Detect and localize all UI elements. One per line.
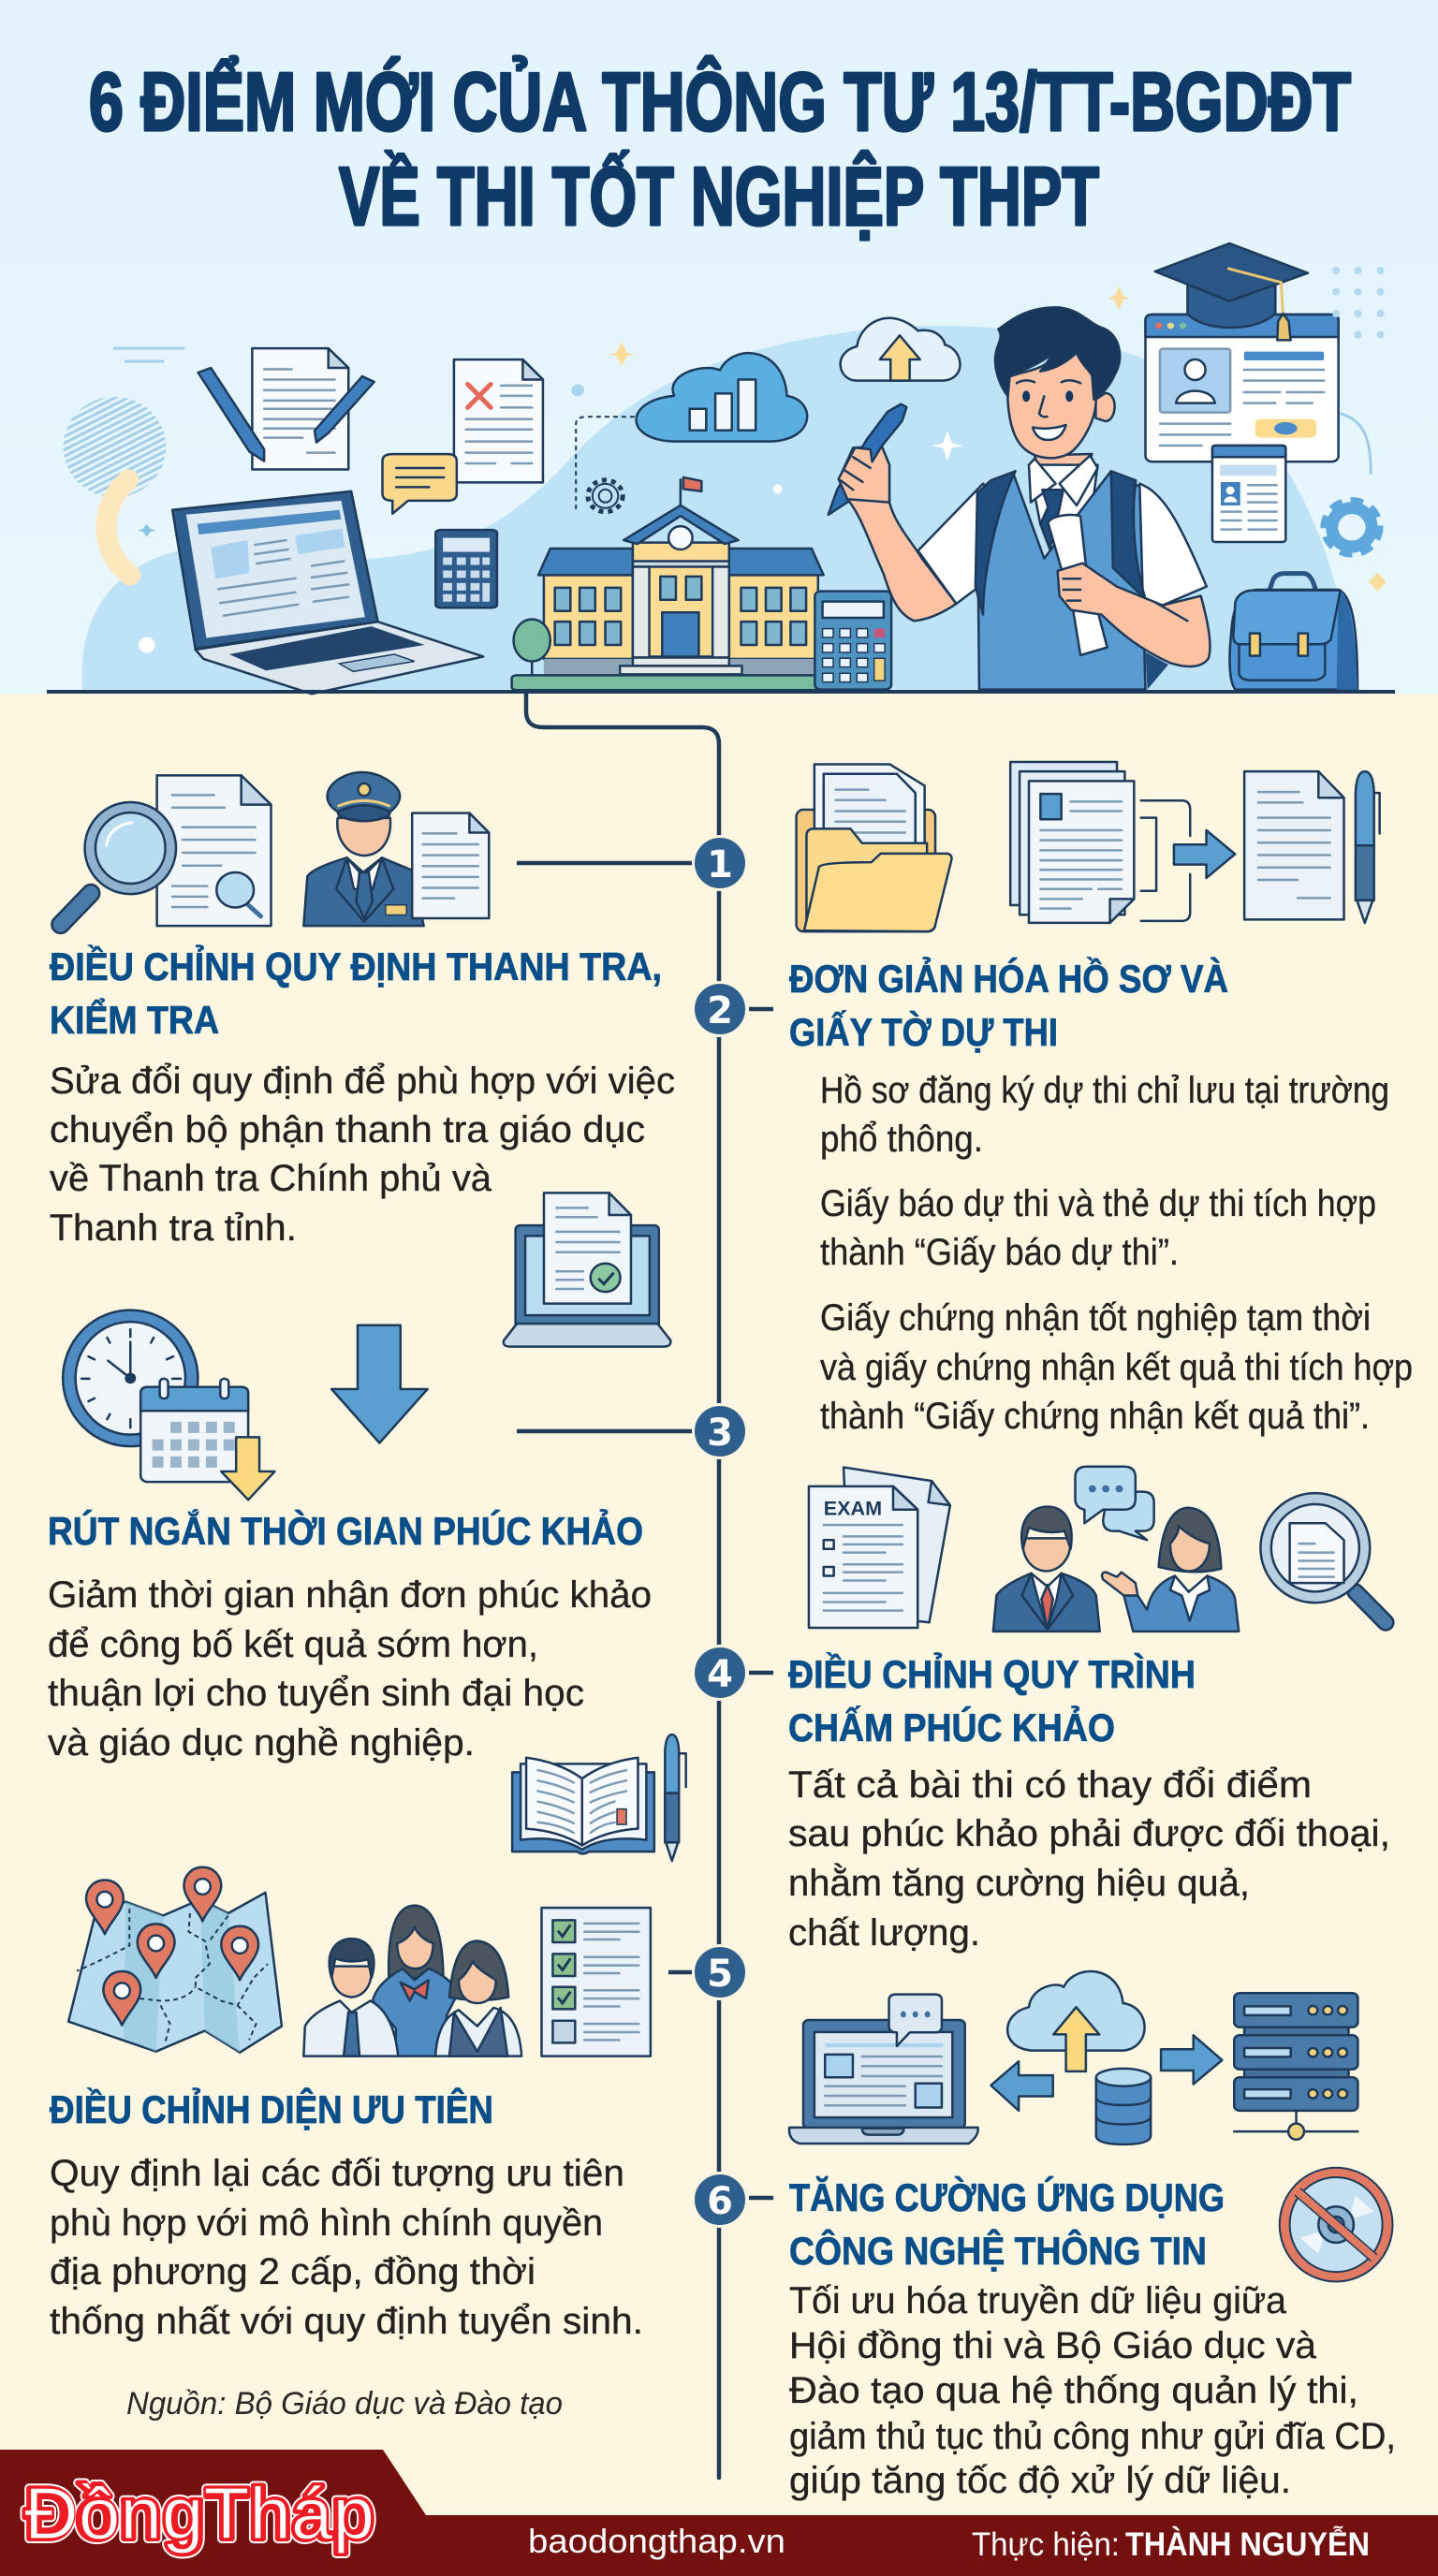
icons: folder, documents merge — [797, 762, 1380, 931]
student — [829, 307, 1210, 690]
briefcase — [1230, 574, 1357, 690]
body text: Giấy chứng nhận tốt nghiệp tạm thời — [820, 1297, 1371, 1339]
number 3: 3 — [707, 1412, 733, 1455]
blue gear — [1325, 502, 1379, 553]
document with red cross — [454, 359, 543, 482]
body text: phù hợp với mô hình chính quyền — [50, 2203, 603, 2244]
small calculator — [435, 530, 497, 607]
number 4: 4 — [707, 1653, 733, 1696]
title — [89, 55, 1351, 242]
panel 3: shorten review time — [48, 1310, 686, 1861]
footer bar — [0, 2450, 1438, 2576]
number 2: 2 — [707, 989, 733, 1032]
body text: Giảm thời gian nhận đơn phúc khảo — [48, 1574, 652, 1616]
source note: Nguồn: Bộ Giáo dục và Đào tạo — [126, 2386, 563, 2422]
heading: TĂNG CƯỜNG ỨNG DỤNG — [789, 2174, 1225, 2219]
heading: GIẤY TỜ DỰ THI — [789, 1009, 1058, 1054]
number 2 — [693, 983, 747, 1035]
number 5 — [693, 1945, 747, 1999]
header background — [0, 0, 1438, 694]
heading: ĐƠN GIẢN HÓA HỒ SƠ VÀ — [789, 956, 1228, 1001]
yellow arc — [106, 479, 130, 575]
number 5: 5 — [707, 1953, 733, 1996]
panel 2: dossier — [789, 762, 1413, 1437]
credit: THÀNH NGUYỄN — [1125, 2525, 1370, 2563]
body text: Tối ưu hóa truyền dữ liệu giữa — [789, 2280, 1287, 2321]
body text — [48, 1574, 652, 1764]
laptop — [172, 491, 483, 694]
body text: để công bố kết quả sớm hơn, — [48, 1624, 538, 1665]
timeline spine — [526, 694, 719, 2478]
panel 4: review procedure — [788, 1467, 1390, 1954]
body text: thống nhất với quy định tuyển sinh. — [50, 2301, 643, 2342]
graduation cap tassel and profile window — [1146, 315, 1339, 461]
icons: map, students, checklist — [68, 1867, 651, 2056]
panel 6: information technology — [789, 1971, 1396, 2501]
heading: KIỂM TRA — [50, 997, 219, 1042]
school building — [512, 477, 824, 690]
dashed connector — [576, 417, 635, 512]
body text — [50, 2153, 643, 2342]
icons: exam paper, dialogue, magnifier: EXAM — [824, 1498, 882, 1520]
logo: Đồng Tháp: ĐồngTháp — [24, 2472, 374, 2554]
heading — [789, 2174, 1225, 2273]
icons: clock, calendar, down arrow — [63, 1310, 428, 1500]
panel 5: priority groups — [50, 1867, 651, 2342]
body text: nhằm tăng cường hiệu quả, — [788, 1862, 1250, 1904]
icons: exam paper, dialogue, magnifier — [809, 1467, 1386, 1632]
body text: giảm thủ tục thủ công như gửi đĩa CD, — [789, 2416, 1396, 2457]
heading: ĐIỀU CHỈNH DIỆN ƯU TIÊN — [50, 2086, 493, 2131]
heading — [788, 1651, 1196, 1749]
credit — [972, 2525, 1370, 2563]
number 6 — [693, 2174, 747, 2226]
ground line — [47, 690, 1395, 694]
body text: Quy định lại các đối tượng ưu tiên — [50, 2153, 624, 2194]
small profile card — [1212, 446, 1285, 542]
credit: Thực hiện: — [972, 2526, 1120, 2563]
body text: chất lượng. — [788, 1912, 980, 1954]
panel 1: inspection — [50, 772, 675, 1347]
body text: Hội đồng thi và Bộ Giáo dục và — [789, 2325, 1317, 2366]
heading: CÔNG NGHỆ THÔNG TIN — [789, 2228, 1207, 2273]
timeline connectors — [517, 863, 773, 2198]
body text: Sửa đổi quy định để phù hợp với việc — [50, 1061, 675, 1102]
connector arc — [1341, 414, 1371, 475]
body text: địa phương 2 cấp, đồng thời — [50, 2251, 536, 2292]
dotted grid — [1332, 267, 1385, 339]
body text: thuận lợi cho tuyển sinh đại học — [48, 1673, 584, 1714]
cloud with bars — [637, 353, 807, 442]
number 3 — [693, 1404, 747, 1458]
body text: thành “Giấy báo dự thi”. — [820, 1232, 1179, 1273]
body text: chuyển bộ phận thanh tra giáo dục — [50, 1109, 645, 1150]
body text: Tất cả bài thi có thay đổi điểm — [788, 1764, 1312, 1806]
heading: CHẤM PHÚC KHẢO — [788, 1705, 1115, 1749]
body text: về Thanh tra Chính phủ và — [50, 1158, 492, 1199]
number 4 — [693, 1646, 747, 1700]
body text: Giấy báo dự thi và thẻ dự thi tích hợp — [820, 1183, 1376, 1224]
body text — [50, 1061, 675, 1249]
upload cloud — [841, 318, 961, 381]
icon: open book and pen — [512, 1734, 686, 1861]
body text: giúp tăng tốc độ xử lý dữ liệu. — [789, 2460, 1291, 2501]
body text: Thanh tra tỉnh. — [50, 1208, 297, 1249]
small gear — [588, 480, 623, 512]
background blob — [82, 326, 1357, 689]
body text: và giáo dục nghề nghiệp. — [48, 1722, 475, 1764]
hero illustration — [47, 243, 1395, 694]
number 6: 6 — [707, 2180, 733, 2223]
heading: RÚT NGẮN THỜI GIAN PHÚC KHẢO — [48, 1508, 643, 1553]
body text — [788, 1764, 1390, 1954]
icon: laptop with approved document — [504, 1193, 670, 1347]
icons: laptop, cloud, database, server, crossed disc — [789, 1971, 1393, 2281]
heading — [789, 956, 1228, 1054]
document with pens — [198, 348, 374, 469]
logo: Đồng Tháp: ĐồngTháp — [24, 2472, 374, 2554]
body text — [789, 2280, 1396, 2501]
website: baodongthap.vn — [528, 2522, 785, 2560]
number 1 — [693, 837, 747, 889]
heading: ĐIỀU CHỈNH QUY ĐỊNH THANH TRA, — [50, 944, 662, 988]
body text — [820, 1070, 1413, 1437]
icons: magnifier, document, officer — [61, 772, 489, 926]
body text: sau phúc khảo phải được đối thoại, — [788, 1813, 1390, 1854]
heading: ĐIỀU CHỈNH QUY TRÌNH — [788, 1651, 1196, 1696]
title: VỀ THI TỐT NGHIỆP THPT — [339, 150, 1099, 242]
body text: thành “Giấy chứng nhận kết quả thi”. — [820, 1396, 1370, 1437]
graduation cap — [1155, 243, 1308, 340]
body text: phổ thông. — [820, 1119, 983, 1160]
chat bubble — [382, 454, 457, 514]
body text: Đào tạo qua hệ thống quản lý thi, — [789, 2370, 1358, 2411]
content background — [0, 694, 1438, 2576]
yellow diamond — [1369, 573, 1387, 592]
number 1: 1 — [707, 843, 733, 886]
large calculator — [814, 592, 891, 690]
sparkles — [138, 286, 1130, 652]
logo: Đồng Tháp: ĐồngTháp — [24, 2472, 374, 2554]
heading — [50, 944, 662, 1042]
hatched circle — [64, 397, 166, 497]
